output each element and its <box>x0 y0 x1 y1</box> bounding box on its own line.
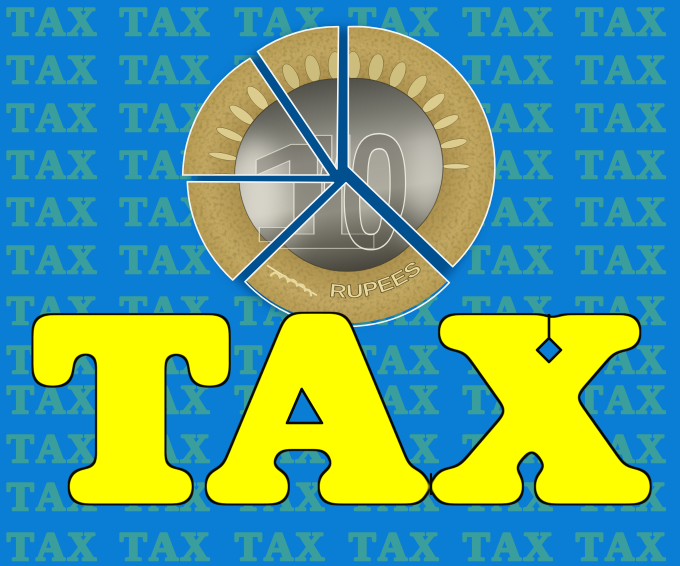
title: TAX <box>43 269 640 545</box>
repeated TAX background pattern: TAX <box>349 0 441 44</box>
repeated TAX background pattern: TAX <box>7 142 99 187</box>
repeated TAX background pattern: TAX <box>120 426 212 471</box>
repeated TAX background pattern: TAX <box>7 237 99 282</box>
repeated TAX background pattern: TAX <box>349 474 441 519</box>
repeated TAX background pattern: TAX <box>463 337 555 382</box>
repeated TAX background pattern: TAX <box>120 189 212 234</box>
repeated TAX background pattern: TAX <box>349 377 441 422</box>
repeated TAX background pattern: TAX <box>576 189 668 234</box>
repeated TAX background pattern: TAX <box>576 237 668 282</box>
repeated TAX background pattern: TAX <box>576 47 668 92</box>
repeated TAX background pattern: TAX <box>349 142 441 187</box>
repeated TAX background pattern: TAX <box>235 47 327 92</box>
repeated TAX background pattern: TAX <box>576 0 668 44</box>
repeated TAX background pattern: TAX <box>463 474 555 519</box>
repeated TAX background pattern: TAX <box>120 142 212 187</box>
coin slice: bottom with RUPEES legend: RUPEES <box>330 262 420 298</box>
repeated TAX background pattern: TAX <box>463 142 555 187</box>
repeated TAX background pattern: TAX <box>7 337 99 382</box>
repeated TAX background pattern: TAX <box>576 426 668 471</box>
repeated TAX background pattern: TAX <box>7 288 99 333</box>
repeated TAX background pattern: TAX <box>7 0 99 44</box>
repeated TAX background pattern: TAX <box>463 189 555 234</box>
repeated TAX background pattern: TAX <box>463 426 555 471</box>
repeated TAX background pattern: TAX <box>120 0 212 44</box>
repeated TAX background pattern: TAX <box>576 288 668 333</box>
repeated TAX background pattern: TAX <box>235 377 327 422</box>
divider between A and X <box>430 474 432 494</box>
repeated TAX background pattern: TAX <box>463 288 555 333</box>
repeated TAX background pattern: TAX <box>7 377 99 422</box>
coin slice: bottom with RUPEES legend <box>244 182 450 328</box>
letter A counter <box>287 389 322 423</box>
coin slice: upper left <box>182 58 330 176</box>
repeated TAX background pattern: TAX <box>235 0 327 44</box>
repeated TAX background pattern: TAX <box>576 142 668 187</box>
repeated TAX background pattern: TAX <box>576 474 668 519</box>
repeated TAX background pattern: TAX <box>576 337 668 382</box>
repeated TAX background pattern: TAX <box>463 95 555 140</box>
repeated TAX background pattern: TAX <box>349 189 441 234</box>
repeated TAX background pattern: TAX <box>235 142 327 187</box>
repeated TAX background pattern: TAX <box>7 189 99 234</box>
letter X: X <box>442 269 640 545</box>
repeated TAX background pattern: TAX <box>120 237 212 282</box>
repeated TAX background pattern: TAX <box>120 95 212 140</box>
repeated TAX background pattern: TAX <box>349 337 441 382</box>
repeated TAX background pattern: TAX <box>349 95 441 140</box>
repeated TAX background pattern: TAX <box>120 377 212 422</box>
repeated TAX background pattern: TAX <box>463 47 555 92</box>
coin shadow <box>193 28 487 322</box>
repeated TAX background pattern: TAX <box>463 377 555 422</box>
repeated TAX background pattern: TAX <box>235 288 327 333</box>
repeated TAX background pattern: TAX <box>7 426 99 471</box>
repeated TAX background pattern: TAX <box>235 426 327 471</box>
repeated TAX background pattern: TAX <box>7 95 99 140</box>
letter A: A <box>217 269 415 545</box>
repeated TAX background pattern: TAX <box>463 0 555 44</box>
repeated TAX background pattern: TAX <box>235 237 327 282</box>
repeated TAX background pattern: TAX <box>576 95 668 140</box>
letter T: T <box>43 269 219 545</box>
repeated TAX background pattern: TAX <box>120 474 212 519</box>
repeated TAX background pattern: TAX <box>235 337 327 382</box>
repeated TAX background pattern: TAX <box>7 47 99 92</box>
repeated TAX background pattern: TAX <box>576 377 668 422</box>
repeated TAX background pattern: TAX <box>463 237 555 282</box>
repeated TAX background pattern: TAX <box>235 95 327 140</box>
repeated TAX background pattern: TAX <box>235 189 327 234</box>
repeated TAX background pattern: TAX <box>7 474 99 519</box>
coin slice: lower left <box>186 180 334 281</box>
repeated TAX background pattern: TAX <box>349 426 441 471</box>
repeated TAX background pattern: TAX <box>120 337 212 382</box>
repeated TAX background pattern: TAX <box>120 288 212 333</box>
coin pie chart <box>182 26 496 328</box>
repeated TAX background pattern: TAX <box>120 47 212 92</box>
coin slice: right <box>348 26 496 268</box>
coin slice: top <box>256 26 340 170</box>
repeated TAX background pattern: TAX <box>235 474 327 519</box>
repeated TAX background pattern: TAX <box>349 47 441 92</box>
repeated TAX background pattern: TAX <box>349 237 441 282</box>
repeated TAX background pattern: TAX <box>349 288 441 333</box>
letter X notch <box>537 314 561 362</box>
